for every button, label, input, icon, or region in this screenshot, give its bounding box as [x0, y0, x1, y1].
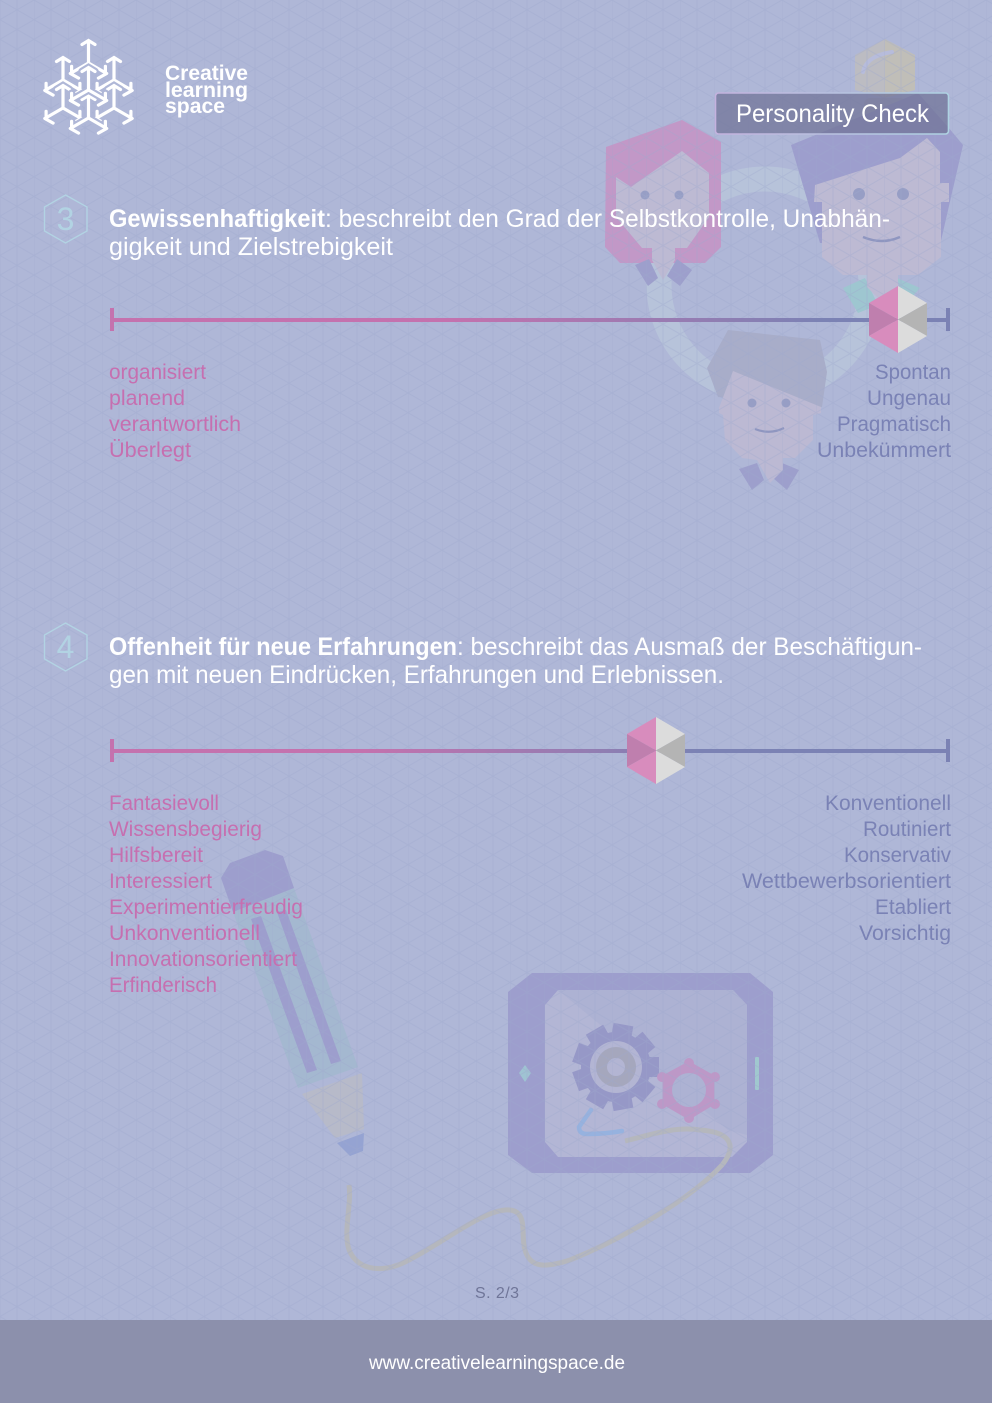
left traits 4: Innovationsorientiert — [109, 947, 297, 971]
left traits 4: Wissensbegierig — [109, 817, 262, 841]
right traits 4: Wettbewerbsorientiert — [742, 869, 951, 893]
title badge: Personality Check — [716, 93, 948, 134]
heading: Offenheit — [109, 633, 922, 689]
scale bar 4 — [110, 739, 950, 762]
heading: Gewissenhaftigkeit: gigkeit und Zielstrebigkeit — [109, 233, 393, 261]
left traits 3: organisiert — [109, 360, 206, 384]
left traits 3: planend — [109, 386, 185, 410]
right traits 3: Spontan — [875, 360, 951, 384]
logo wordmark: Creative — [165, 62, 248, 85]
right traits 3: Unbekümmert — [817, 438, 951, 462]
left traits 4 — [109, 791, 303, 997]
illustration: tablet with gears — [508, 973, 773, 1173]
number badge 3 — [44, 195, 87, 243]
left traits 4: Fantasievoll — [109, 791, 219, 815]
left traits 4: Interessiert — [109, 869, 212, 893]
heading: Gewissenhaftigkeit — [109, 205, 890, 261]
title badge: Personality Check: Personality Check — [736, 100, 929, 128]
right traits 3 — [817, 360, 951, 462]
right traits 4: Routiniert — [863, 817, 951, 841]
right traits 3: Ungenau — [867, 386, 951, 410]
left traits 3: Überlegt — [109, 438, 191, 462]
heading: Gewissenhaftigkeit: : beschreibt den Grad der Selbstkontrolle, Unabhän- — [325, 205, 890, 233]
heading: Offenheit: Offenheit für neue Erfahrungen — [109, 633, 457, 661]
scale marker 4 — [627, 717, 685, 784]
number badge 3: 3 — [57, 201, 74, 237]
heading: Offenheit: : beschreibt das Ausmaß der Beschäftigun- — [457, 633, 922, 661]
page number: S. 2/3 — [475, 1285, 519, 1302]
left traits 4: Unkonventionell — [109, 921, 260, 945]
left traits 3: verantwortlich — [109, 412, 241, 436]
number badge 4 — [44, 623, 87, 671]
scribble line from pencil to tablet — [347, 1129, 730, 1269]
right traits 4: Vorsichtig — [859, 921, 951, 945]
logo wordmark: space — [165, 95, 225, 118]
illustration: pencil — [221, 850, 364, 1156]
scale bar 3 — [110, 308, 950, 331]
left traits 3 — [109, 360, 241, 462]
left traits 4: Erfinderisch — [109, 973, 217, 997]
right traits 4: Etabliert — [875, 895, 951, 919]
logo wordmark — [165, 62, 248, 118]
left traits 4: Hilfsbereit — [109, 843, 203, 867]
footer band: www.creativelearningspace.de — [368, 1353, 625, 1374]
logo icon — [45, 40, 132, 133]
scale marker 3 — [869, 286, 927, 353]
right traits 3: Pragmatisch — [837, 412, 951, 436]
logo wordmark: learning — [165, 79, 248, 102]
heading: Gewissenhaftigkeit: Gewissenhaftigkeit — [109, 205, 326, 233]
right traits 4 — [742, 791, 951, 945]
right traits 4: Konventionell — [825, 791, 951, 815]
left traits 4: Experimentierfreudig — [109, 895, 303, 919]
illustration: three connected people — [605, 39, 963, 490]
footer band — [0, 1320, 992, 1403]
number badge 4: 4 — [57, 629, 74, 665]
heading: Offenheit: gen mit neuen Eindrücken, Erfahrungen und Erlebnissen. — [109, 661, 724, 689]
right traits 4: Konservativ — [844, 843, 951, 867]
